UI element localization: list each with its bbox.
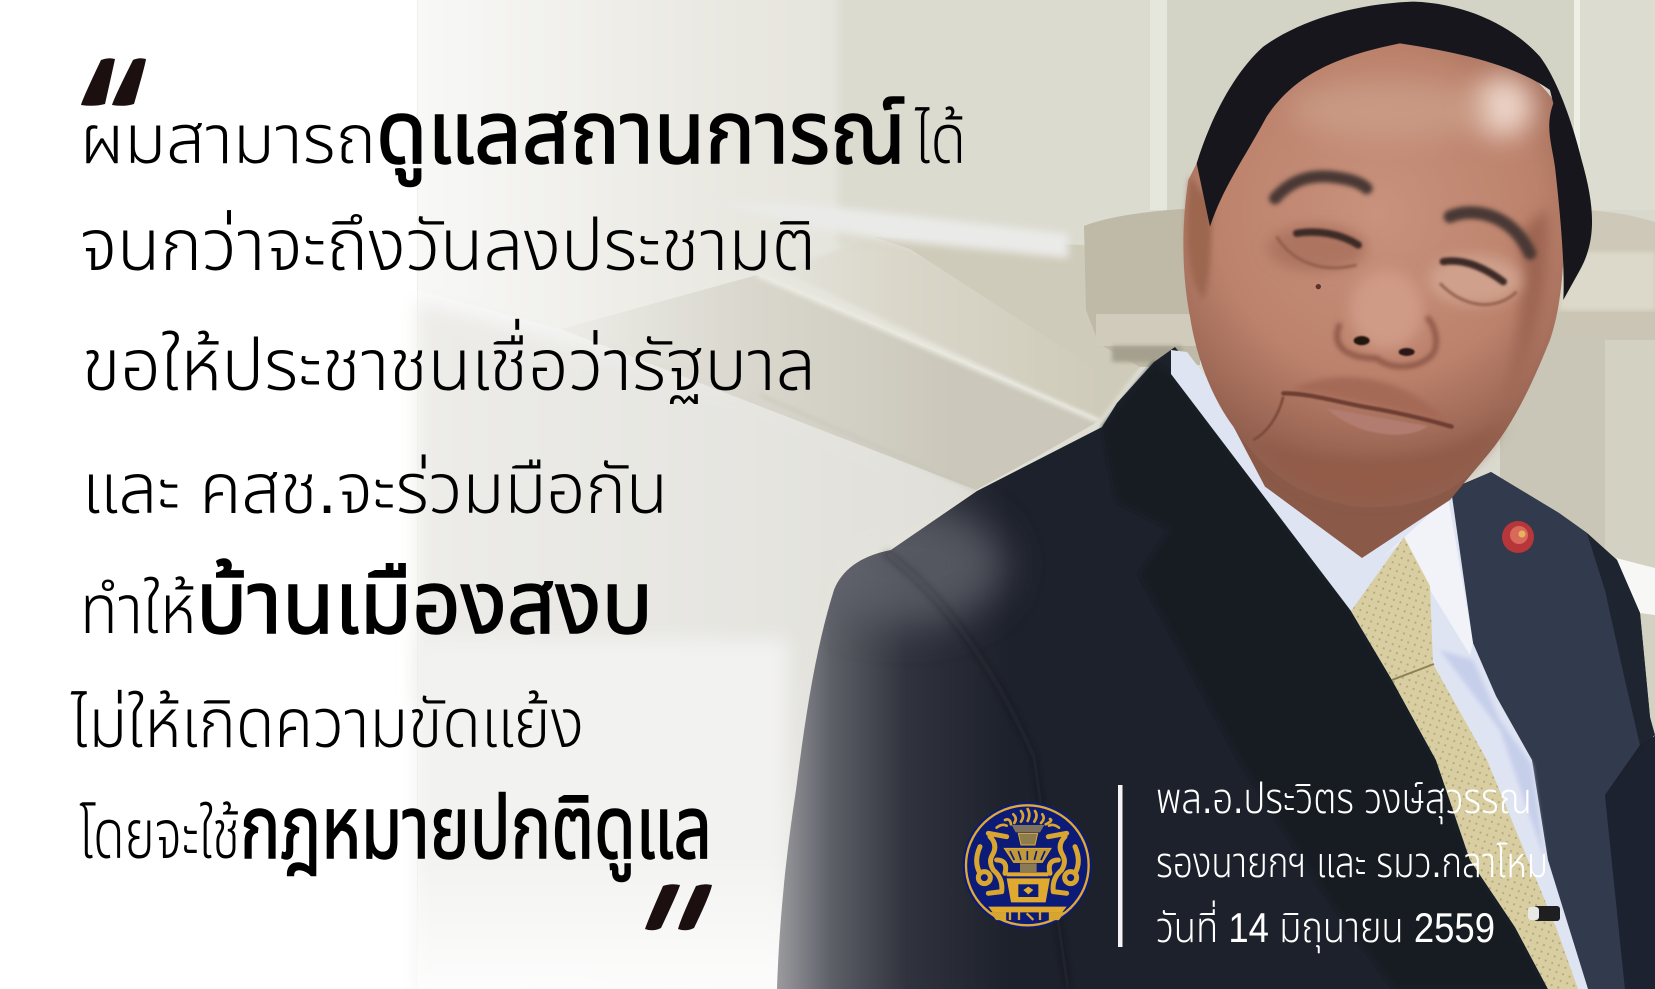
man in suit [777, 347, 1655, 989]
right jacket edge [1587, 533, 1655, 745]
line 7: โดยจะใช้ [79, 797, 240, 873]
date: วันที่ 14 มิถุนายน 2559 [1156, 900, 1495, 954]
lower right pocket shade [1605, 735, 1655, 989]
line 1 [80, 83, 966, 186]
pedestal [1007, 878, 1050, 902]
name: พล.อ.ประวิตร วงษ์สุวรรณ [1156, 775, 1532, 825]
vase [1004, 825, 1051, 876]
line 2: จนกว่าจะถึงวันลงประชามติ [80, 206, 816, 286]
ear shade [1187, 177, 1213, 300]
line 5: บ้านเมืองสงบ [196, 553, 653, 652]
white left panel [0, 0, 418, 989]
attribution text [1156, 775, 1548, 954]
mole [1316, 284, 1321, 289]
right eyebrow [1450, 213, 1530, 253]
shoulder light [805, 505, 1005, 625]
left eye [1297, 232, 1358, 245]
shirt collar [1382, 497, 1473, 655]
lapel pin [1502, 521, 1534, 553]
closing quotation mark [645, 884, 712, 930]
line 1: ดูแลสถานการณ์ [376, 83, 906, 186]
hair [1197, 2, 1592, 300]
left lapel [1102, 362, 1548, 989]
shirt [1171, 350, 1588, 989]
mouth [1283, 393, 1452, 427]
left lion [977, 833, 1007, 893]
line 7 [79, 778, 712, 881]
nose [1350, 270, 1423, 350]
line 1: ผมสามารถ [80, 102, 376, 178]
line 7: กฎหมายปกติดูแล [240, 778, 712, 881]
neck [1230, 400, 1483, 558]
shirt shadow [1440, 650, 1545, 860]
tie clip [1534, 906, 1560, 921]
eye sockets [1267, 225, 1367, 272]
vertical divider [1118, 785, 1122, 947]
right lapel [1451, 472, 1640, 989]
left eyebrow [1275, 176, 1367, 198]
right eye [1443, 261, 1503, 282]
face [1183, 33, 1564, 507]
opening quotation mark [81, 58, 146, 106]
head [1183, 2, 1592, 558]
right lion [1048, 833, 1078, 893]
line 6: ไม่ให้เกิดความขัดแย้ง [70, 686, 584, 762]
government seal [963, 802, 1092, 929]
position: รองนายกฯ และ รมว.กลาโหม [1156, 839, 1548, 886]
right face edge shade [1503, 207, 1548, 410]
cheek shade [1257, 420, 1503, 500]
line 3: ขอให้ประชาชนเชื่อว่ารัฐบาล [82, 318, 816, 406]
seal disc [963, 802, 1092, 929]
tie [1351, 537, 1578, 989]
shoulder seam [885, 552, 1068, 989]
flames [997, 809, 1059, 828]
smile line [1253, 397, 1283, 440]
line 5: ทำให้ [80, 572, 196, 648]
line 1: ได้ [914, 102, 966, 178]
line 4: และ คสช.จะร่วมมือกัน [82, 450, 668, 528]
suit jacket [777, 347, 1655, 989]
photo background: stairwell [417, 0, 1655, 989]
quote text [70, 83, 966, 881]
forehead highlight [1473, 77, 1533, 137]
upper lip shade [1290, 377, 1450, 423]
lower band [988, 907, 1067, 912]
